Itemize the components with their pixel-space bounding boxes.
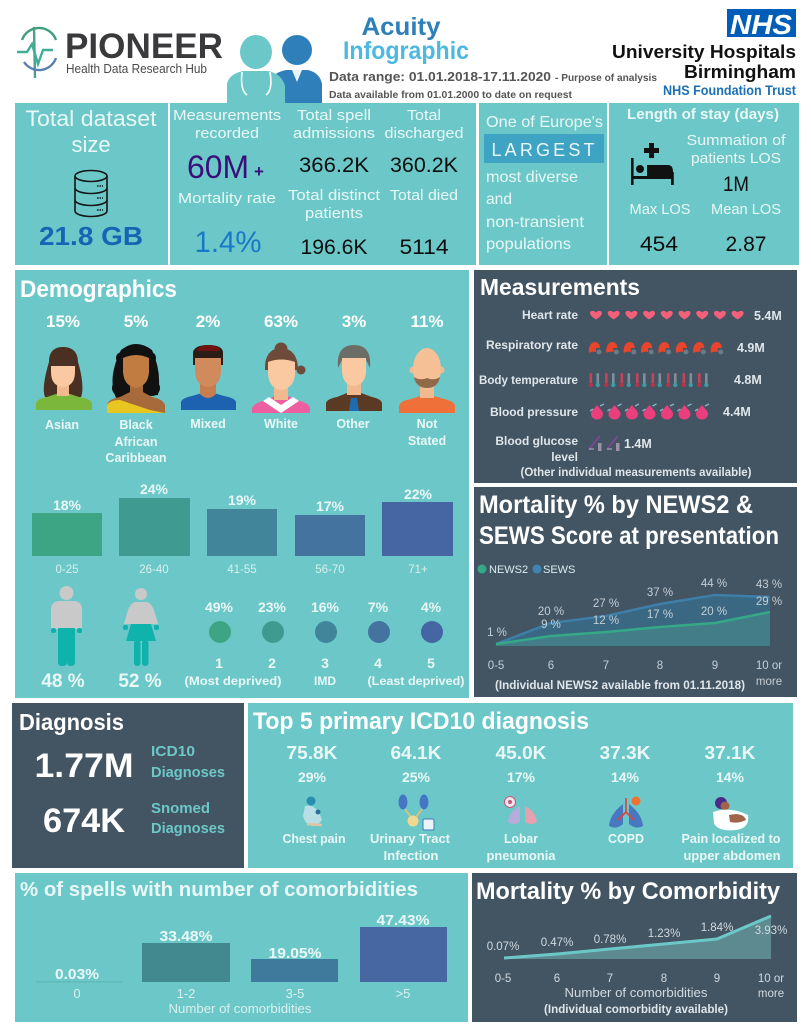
icon: database xyxy=(75,170,107,216)
area chart: 6 xyxy=(548,660,554,672)
percentages: 14% xyxy=(716,769,745,785)
percentages: 29% xyxy=(298,769,327,785)
labels: COPD xyxy=(608,832,644,846)
icon: female figure xyxy=(123,588,159,666)
axis title: Number of comorbidities xyxy=(564,985,708,1000)
panel: dataset counts: recorded xyxy=(195,125,259,142)
icon: abdominal pain xyxy=(713,797,748,830)
chart: IMD xyxy=(184,599,464,688)
icon: hospital bed xyxy=(631,143,674,185)
logo: NHS: NHS Foundation Trust xyxy=(663,83,796,98)
area chart: 9 xyxy=(712,660,718,672)
heading: Mortality % by NEWS2 & xyxy=(479,491,753,519)
panel: length of stay: Mean LOS xyxy=(711,201,781,218)
legend: NEWS2 xyxy=(489,564,528,576)
callout: largest: LARGEST xyxy=(492,140,594,160)
chart: IMD: 1 xyxy=(215,655,223,671)
heading: Demographics xyxy=(20,276,177,303)
counts: 37.1K xyxy=(704,743,756,763)
area chart: 8 xyxy=(657,660,663,672)
area chart: 6 xyxy=(554,973,560,985)
area chart: 27 % xyxy=(593,598,619,610)
panel: Europe's largest: non-transient xyxy=(486,214,585,231)
area chart: 37 % xyxy=(647,587,673,599)
data range text xyxy=(329,69,657,101)
counts: 64.1K xyxy=(390,743,442,763)
icons: blood glucose xyxy=(589,436,620,451)
icon: lobar pneumonia xyxy=(504,796,537,824)
bar chart: age: 0-25 xyxy=(55,564,79,576)
area chart: more xyxy=(756,676,782,688)
panel: total dataset size: size xyxy=(71,132,111,157)
ethnicity percentages: 2% xyxy=(196,312,220,331)
logo: NHS: Birmingham xyxy=(684,62,796,82)
logo: PIONEER xyxy=(17,27,223,78)
panel: dataset counts xyxy=(170,103,476,265)
ethnicity percentages: 11% xyxy=(410,312,444,331)
title: Acuity xyxy=(362,13,441,41)
ethnicity percentages: 3% xyxy=(342,312,366,331)
percentages: 25% xyxy=(402,769,431,785)
icons: respiratory rate xyxy=(589,342,723,354)
area chart: 10 or xyxy=(756,660,782,672)
bar chart: age: 41-55 xyxy=(227,564,257,576)
gender percentages: 48 % xyxy=(41,671,85,692)
icon: chest pain xyxy=(303,796,322,826)
bar chart xyxy=(36,912,447,1016)
panel: dataset counts: discharged xyxy=(384,125,464,142)
chart: IMD: 23% xyxy=(258,599,287,615)
area chart: 7 xyxy=(607,973,613,985)
ethnicity percentages: 5% xyxy=(124,312,148,331)
logo: NHS: NHS xyxy=(730,9,792,40)
area chart: 9 % xyxy=(541,619,561,631)
panel: length of stay: Summation of xyxy=(686,132,786,149)
bar chart: age: 24% xyxy=(140,481,169,497)
area chart: 7 xyxy=(603,660,609,672)
values: 5.4M xyxy=(754,309,782,323)
chart: IMD: 4% xyxy=(421,599,442,615)
data range text: - Purpose of analysis xyxy=(555,72,657,84)
stat: mortality rate: 1.4% xyxy=(194,226,262,259)
bar chart: age xyxy=(32,481,453,576)
stat: measurements: 60M xyxy=(187,149,249,185)
panel: dataset counts: Total distinct xyxy=(288,187,381,204)
bar chart: 3-5 xyxy=(286,986,304,1001)
bar chart: age: 26-40 xyxy=(139,564,169,576)
ethnicity labels: White xyxy=(264,417,298,431)
icon: pioneer emblem xyxy=(17,27,56,78)
ethnicity labels: Stated xyxy=(408,434,446,448)
panel: total dataset size xyxy=(15,103,168,265)
area chart: 0-5 xyxy=(488,660,504,672)
icon: clinicians xyxy=(227,35,322,103)
row labels: Body temperature xyxy=(479,373,578,387)
data range text: Data range: 01.01.2018-17.11.2020 xyxy=(329,69,551,84)
legend: SEWS xyxy=(543,564,575,576)
area chart: 43 % xyxy=(756,579,782,591)
panel: dataset counts: Total xyxy=(407,107,441,124)
stat: Snomed: Diagnoses xyxy=(151,820,225,837)
tagline: Health Data Research Hub xyxy=(66,62,207,76)
panel: dataset counts: 5114 xyxy=(400,236,449,259)
area chart: 44 % xyxy=(701,578,727,590)
panel: diagnosis xyxy=(12,703,244,868)
panel: mortality by NEWS2 and SEWS xyxy=(474,487,797,697)
percentages: 17% xyxy=(507,769,536,785)
ethnicity labels xyxy=(45,417,446,465)
note: (Individual NEWS2 available from 01.11.2018) xyxy=(495,680,745,692)
panel: total dataset size: 21.8 GB xyxy=(39,221,143,251)
panel: mortality by NEWS2 and SEWS: SEWS Score at presentation xyxy=(479,522,779,550)
ethnicity labels: Not xyxy=(417,417,438,431)
bar chart: age: 17% xyxy=(316,498,345,514)
chart: IMD: 49% xyxy=(205,599,234,615)
panel: dataset counts: 360.2K xyxy=(390,154,458,177)
row labels: Blood pressure xyxy=(490,405,578,419)
bar chart: 47.43% xyxy=(376,912,430,929)
ethnicity labels: Black xyxy=(119,418,153,432)
panel: dataset counts: 196.6K xyxy=(300,236,368,259)
labels: upper abdomen xyxy=(684,849,780,863)
panel: Europe's largest: and xyxy=(486,191,512,208)
row labels: Respiratory rate xyxy=(486,338,578,352)
panel: mortality by comorbidity xyxy=(472,873,797,1022)
panel: length of stay: Max LOS xyxy=(630,201,690,218)
counts: 37.3K xyxy=(600,743,650,763)
panel: Europe's largest: populations xyxy=(486,236,571,253)
icon: Not Stated xyxy=(399,348,455,413)
panel: length of stay xyxy=(609,103,799,265)
chart: IMD: 4 xyxy=(374,655,382,671)
panel: length of stay: 1M xyxy=(723,173,749,196)
data range text: Data available from 01.01.2000 to date on request xyxy=(329,89,572,101)
icon: male figure xyxy=(51,586,82,666)
note: (Individual comorbidity available) xyxy=(544,1004,728,1016)
ethnicity labels: African xyxy=(114,435,158,449)
heading: Diagnosis xyxy=(19,709,124,735)
bar chart: age: 22% xyxy=(404,486,433,502)
area chart xyxy=(487,578,782,688)
icon: Black African Caribbean xyxy=(107,344,165,413)
gender percentages xyxy=(41,671,162,692)
bar chart: 1-2 xyxy=(177,986,195,1001)
area chart: 8 xyxy=(661,973,667,985)
values: 4.9M xyxy=(737,341,765,355)
bar chart: 19.05% xyxy=(268,945,322,962)
icon: COPD xyxy=(609,796,643,828)
panel: spells by comorbidities xyxy=(15,873,468,1022)
labels: Lobar xyxy=(504,832,538,846)
ethnicity labels: Mixed xyxy=(190,417,226,431)
labels: Chest pain xyxy=(282,832,346,846)
labels: pneumonia xyxy=(486,849,557,863)
values: 4.8M xyxy=(734,373,762,387)
labels: Pain localized to xyxy=(682,832,781,846)
area chart: 20 % xyxy=(538,606,564,618)
panel: dataset counts: 366.2K xyxy=(299,154,369,177)
callout: largest xyxy=(484,134,604,163)
ethnicity labels: Asian xyxy=(45,418,79,432)
panel: length of stay: 454 xyxy=(640,233,678,256)
stat: ICD10: 1.77M xyxy=(34,747,134,785)
stat: Snomed: Snomed xyxy=(151,800,210,817)
chart: IMD: 2 xyxy=(268,655,276,671)
chart: IMD: 16% xyxy=(311,599,340,615)
panel: measurements xyxy=(474,270,797,483)
logo: NHS: University Hospitals xyxy=(612,42,796,62)
ethnicity percentages xyxy=(46,312,444,331)
percentages xyxy=(298,769,745,785)
panel: demographics xyxy=(15,270,469,698)
ethnicity labels: Caribbean xyxy=(105,451,167,465)
area chart: 1.84% xyxy=(701,922,733,934)
stat: ICD10: ICD10 xyxy=(151,743,195,760)
icon: urinary tract xyxy=(398,794,434,830)
area chart: 3.93% xyxy=(755,925,787,937)
stat: Snomed xyxy=(43,800,225,840)
area chart: 17 % xyxy=(647,609,673,621)
panel: dataset counts: Total died xyxy=(390,187,458,204)
panel: Europe's largest xyxy=(479,103,607,265)
area chart: 1.23% xyxy=(648,928,680,940)
ethnicity percentages: 15% xyxy=(46,312,80,331)
title xyxy=(343,13,469,65)
labels xyxy=(282,832,781,863)
row labels xyxy=(479,308,578,464)
values: 4.4M xyxy=(723,405,751,419)
area chart xyxy=(487,916,787,1000)
counts: 45.0K xyxy=(496,743,546,763)
bar chart: age: 18% xyxy=(53,497,82,513)
chart: IMD: (Least deprived) xyxy=(368,674,464,688)
logo: NHS xyxy=(612,9,796,98)
panel: length of stay: patients LOS xyxy=(691,150,781,167)
area chart: 0.47% xyxy=(541,937,573,949)
counts xyxy=(286,743,756,763)
chart: IMD: 5 xyxy=(427,655,435,671)
icon: Mixed xyxy=(181,345,236,410)
panel: top 5 diagnoses xyxy=(248,703,793,868)
chart: IMD: (Most deprived) xyxy=(184,674,282,688)
area chart: 0.78% xyxy=(594,934,626,946)
area chart: more xyxy=(758,988,784,1000)
area chart: 12 % xyxy=(593,615,619,627)
bar chart: >5 xyxy=(396,986,410,1001)
area chart: 20 % xyxy=(701,606,727,618)
panel: dataset counts: Total spell xyxy=(297,107,371,124)
values: 1.4M xyxy=(624,437,652,451)
ethnicity labels: Other xyxy=(336,417,370,431)
area chart: 0.07% xyxy=(487,941,519,953)
icon: Other xyxy=(326,345,382,411)
labels: Urinary Tract xyxy=(370,832,451,846)
area chart: 0-5 xyxy=(495,973,511,985)
panel: dataset counts: patients xyxy=(305,205,363,222)
row labels: Blood glucose xyxy=(495,434,578,448)
icons: heart rate xyxy=(590,311,744,320)
icons: blood pressure xyxy=(590,404,709,420)
row labels: Heart rate xyxy=(522,308,578,322)
panel: Europe's largest: One of Europe's xyxy=(486,114,603,131)
chart: IMD: 3 xyxy=(321,655,329,671)
bar chart: age: 71+ xyxy=(408,564,428,576)
row labels: level xyxy=(551,450,578,464)
stat: ICD10 xyxy=(34,743,225,785)
percentages: 14% xyxy=(611,769,640,785)
panel: dataset counts: Measurements xyxy=(173,107,281,124)
chart: IMD: IMD xyxy=(314,674,336,688)
heading: Top 5 primary ICD10 diagnosis xyxy=(253,708,589,735)
icon: Asian xyxy=(36,347,92,410)
panel: dataset counts: Mortality rate xyxy=(178,190,276,207)
labels: Infection xyxy=(384,849,438,863)
counts: 75.8K xyxy=(286,743,338,763)
heading: % of spells with number of comorbidities xyxy=(20,879,418,901)
panel: Europe's largest: most diverse xyxy=(486,169,578,186)
panel: length of stay: Length of stay (days) xyxy=(627,107,779,123)
bar chart: 0 xyxy=(73,986,81,1001)
icon: White xyxy=(252,342,310,413)
area chart: 29 % xyxy=(756,596,782,608)
bar chart: 33.48% xyxy=(160,928,212,945)
bar chart: age: 56-70 xyxy=(315,564,345,576)
stat: ICD10: Diagnoses xyxy=(151,764,225,781)
legend xyxy=(478,564,575,576)
icons: body temperature xyxy=(589,373,708,387)
area chart: 9 xyxy=(714,973,720,985)
ethnicity percentages: 63% xyxy=(264,312,298,331)
heading: Measurements xyxy=(480,274,640,300)
title: Infographic xyxy=(343,37,469,65)
area chart: 1 % xyxy=(487,627,507,639)
bar chart: Number of comorbidities xyxy=(168,1001,312,1016)
bar chart: age: 19% xyxy=(228,492,257,508)
wordmark: PIONEER xyxy=(65,27,223,66)
gender percentages: 52 % xyxy=(118,671,162,692)
chart: IMD: 7% xyxy=(368,599,389,615)
panel: dataset counts: admissions xyxy=(293,125,375,142)
stat: Snomed: 674K xyxy=(43,802,125,840)
panel: dataset counts: + xyxy=(254,162,264,181)
area chart: 10 or xyxy=(758,973,784,985)
note: (Other individual measurements available) xyxy=(520,467,752,479)
panel: total dataset size: Total dataset xyxy=(26,106,156,131)
heading: Mortality % by Comorbidity xyxy=(476,878,781,905)
panel: length of stay: 2.87 xyxy=(726,233,766,256)
values xyxy=(624,309,782,451)
bar chart: 0.03% xyxy=(55,966,99,983)
